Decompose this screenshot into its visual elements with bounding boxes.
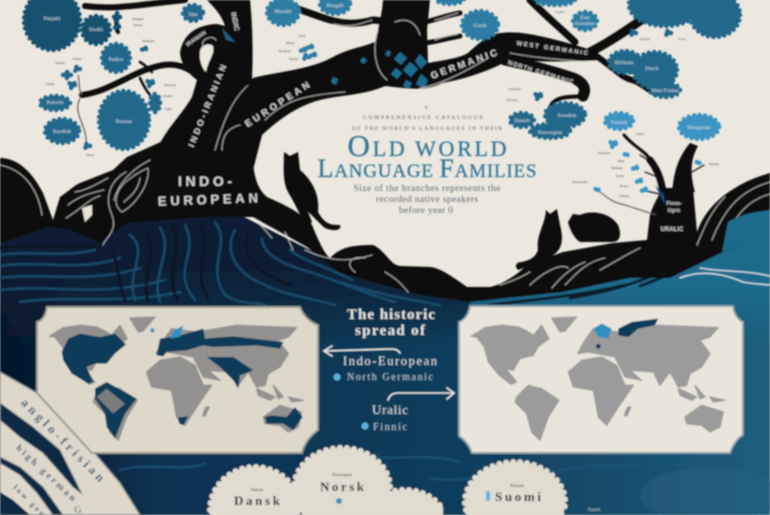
map: spread of Uralic bbox=[459, 306, 743, 453]
Uralic tree: Estonian bbox=[598, 151, 610, 155]
language blobs: Indo-Iranian: Persian bbox=[116, 119, 132, 125]
title block: LANGUAGE FAMILIES bbox=[318, 154, 536, 183]
central legend bbox=[334, 307, 438, 433]
language blobs: West Germanic: Dutch bbox=[645, 66, 659, 72]
language blobs: West Germanic bbox=[609, 0, 740, 97]
European and Germanic branches: EUROPEAN bbox=[243, 80, 312, 130]
trunk label: INDO- bbox=[178, 173, 232, 189]
language blobs: West Germanic: West Frisian bbox=[651, 88, 679, 94]
language blobs: Indic and Slavic tops: Marathi bbox=[274, 9, 292, 15]
language blobs: Indo-Iranian: Mazanq bbox=[164, 83, 176, 87]
descendant blob: Norwegian: Norsk bbox=[320, 479, 365, 494]
trunk: Indo-Iranian branch bbox=[160, 0, 262, 170]
title block: A bbox=[424, 106, 428, 111]
central legend: Indo-European bbox=[343, 354, 438, 368]
Uralic tree: URALIC bbox=[661, 227, 684, 233]
Uralic tree: Udmurt bbox=[619, 194, 629, 198]
descendant blob: Danish: Danish bbox=[251, 487, 264, 492]
central legend: Uralic bbox=[372, 402, 408, 417]
trunk label: EUROPEAN bbox=[158, 190, 258, 209]
Uralic tree: Mokshi bbox=[612, 166, 622, 170]
sea streaks bbox=[0, 222, 770, 480]
Uralic tree: Komi bbox=[616, 174, 624, 178]
language blobs: North Germanic: Swedish bbox=[558, 113, 577, 119]
anglo-frisian bands: anglo-frisian bbox=[18, 396, 107, 485]
language blobs: Indo-Iranian: Shumuni bbox=[142, 39, 154, 43]
anglo-frisian bands bbox=[0, 372, 140, 515]
arrow: to Uralic map bbox=[388, 388, 454, 400]
European and Germanic branches: GERMANIC bbox=[429, 47, 499, 82]
language blobs: Indic and Slavic tops: Bengali bbox=[326, 3, 344, 9]
language blobs: Indic and Slavic tops bbox=[267, 0, 597, 61]
Uralic tree: Finnish bbox=[611, 120, 627, 126]
Uralic tree bbox=[572, 113, 719, 233]
language blobs: West Germanic: Afrikaans bbox=[614, 59, 636, 66]
title block: OF THE WORLD'S LANGUAGES IN THEIR bbox=[352, 126, 502, 132]
descendant blob: Norwegian: Norwegian bbox=[332, 472, 353, 477]
language blobs: Indo-Iranian: Gilaki bbox=[46, 82, 54, 86]
title block bbox=[318, 106, 536, 216]
language blobs: Indic and Slavic tops: Welsh bbox=[286, 41, 295, 45]
language blobs: North Germanic bbox=[507, 87, 585, 138]
descendant blob: Finnish bbox=[465, 462, 565, 515]
language blobs: Indo-Iranian: Pashto bbox=[163, 94, 173, 98]
language blobs: Indic and Slavic tops: Konkani bbox=[279, 49, 291, 53]
language blobs: Indo-Iranian bbox=[24, 0, 203, 157]
central legend: spread of bbox=[355, 323, 426, 339]
Uralic tree: Finno- bbox=[666, 201, 682, 207]
language blobs: Indo-Iranian: Tatsuli bbox=[55, 61, 65, 65]
language blobs: West Germanic: Frisian bbox=[640, 37, 650, 41]
language blobs: North Germanic: Faroese bbox=[507, 98, 518, 102]
European and Germanic branches bbox=[240, 0, 655, 170]
central legend: The historic bbox=[347, 307, 435, 323]
arrow: to Indo-European map bbox=[324, 346, 400, 356]
Uralic tree: Erzya bbox=[620, 184, 629, 188]
title block: COMPREHENSIVE CATALOGUE bbox=[363, 115, 484, 121]
Uralic tree: Samoyedic bbox=[572, 180, 588, 184]
anglo-frisian bands: high german bbox=[13, 443, 78, 504]
language blobs: Indo-Iranian: Ossel bbox=[86, 153, 94, 157]
descendant blob: Danish bbox=[210, 467, 300, 515]
map: spread of Indo-European bbox=[37, 307, 318, 453]
descendant blob: Norwegian bbox=[294, 448, 390, 515]
language blobs: Indic and Slavic tops: Scandian bbox=[575, 21, 595, 27]
language blobs: Indo-Iranian: Paleni bbox=[73, 57, 81, 61]
trunk: Indo-Iranian branch: INDO-IRANIAN bbox=[186, 63, 228, 149]
Uralic tree: Ugric bbox=[668, 208, 681, 214]
language blobs: Indic and Slavic tops: Goth bbox=[298, 34, 306, 38]
language blobs: Indic and Slavic tops: East bbox=[580, 15, 590, 21]
language blobs: Indic and Slavic tops: Greek bbox=[473, 23, 487, 29]
language blobs: West Germanic: Scots bbox=[678, 37, 686, 41]
language blobs: North Germanic: Icelandic bbox=[509, 87, 522, 91]
trunk: Indo-Iranian branch: IRANIAN bbox=[185, 30, 208, 48]
language blobs: Indo-Iranian: Pedice bbox=[109, 57, 124, 63]
language blobs: Indo-Iranian: Punjabi bbox=[44, 16, 61, 22]
title block: recorded native speakers bbox=[376, 195, 478, 205]
trunk label bbox=[158, 173, 258, 209]
Uralic tree: Hungarian bbox=[687, 125, 711, 131]
central legend: North Germanic bbox=[347, 372, 434, 383]
trunk: Indo-Iranian branch: INDIC bbox=[229, 12, 240, 32]
descendant blob: Danish: Dansk bbox=[234, 493, 281, 508]
language blobs: Indo-Iranian: Tajik bbox=[164, 107, 172, 111]
title block: OLD WORLD bbox=[348, 128, 506, 163]
language blobs: Indo-Iranian: Sindhi bbox=[89, 27, 104, 33]
European and Germanic branches: NORTH GERMANIC bbox=[507, 60, 574, 86]
tree ground and roots bbox=[0, 140, 770, 302]
descendant blob: Finnish: Suomi bbox=[495, 489, 541, 504]
cat: large on trunk bbox=[284, 152, 340, 230]
language blobs: Indic and Slavic tops: Gothic bbox=[555, 10, 565, 14]
language blobs: Indo-Iranian: Balochi bbox=[46, 100, 64, 106]
Indo-Iranian side branches bbox=[78, 0, 193, 145]
sea bbox=[0, 210, 770, 515]
cat: crouching bbox=[568, 212, 620, 242]
language blobs: Indic and Slavic tops: Breton bbox=[289, 57, 299, 61]
descendant blob: Finnish: Finnish bbox=[510, 483, 524, 488]
small label: Saami: Saami bbox=[588, 508, 601, 513]
title block: Size of the branches represents the bbox=[354, 183, 500, 194]
language blobs: Indo-Iranian: Kurdish bbox=[53, 129, 71, 135]
language blobs: North Germanic: Danish bbox=[514, 118, 530, 124]
Uralic tree: Mari bbox=[618, 159, 624, 163]
language blobs: Indo-Iranian: Nepali bbox=[133, 23, 143, 27]
Uralic tree: Sami bbox=[636, 132, 644, 136]
language blobs: Indo-Iranian: Danguri bbox=[132, 17, 144, 21]
title block: before year 0 bbox=[399, 205, 453, 216]
language blobs: North Germanic: Norwegian bbox=[538, 130, 562, 136]
European and Germanic branches: WEST GERMANIC bbox=[516, 41, 589, 57]
central legend: Finnic bbox=[373, 422, 408, 433]
cat: sitting right bbox=[516, 209, 562, 270]
Uralic tree: Khanty bbox=[709, 162, 719, 166]
descendant blob: lower bbox=[367, 490, 443, 515]
language blobs: Indo-Iranian: Mai bbox=[189, 12, 198, 18]
